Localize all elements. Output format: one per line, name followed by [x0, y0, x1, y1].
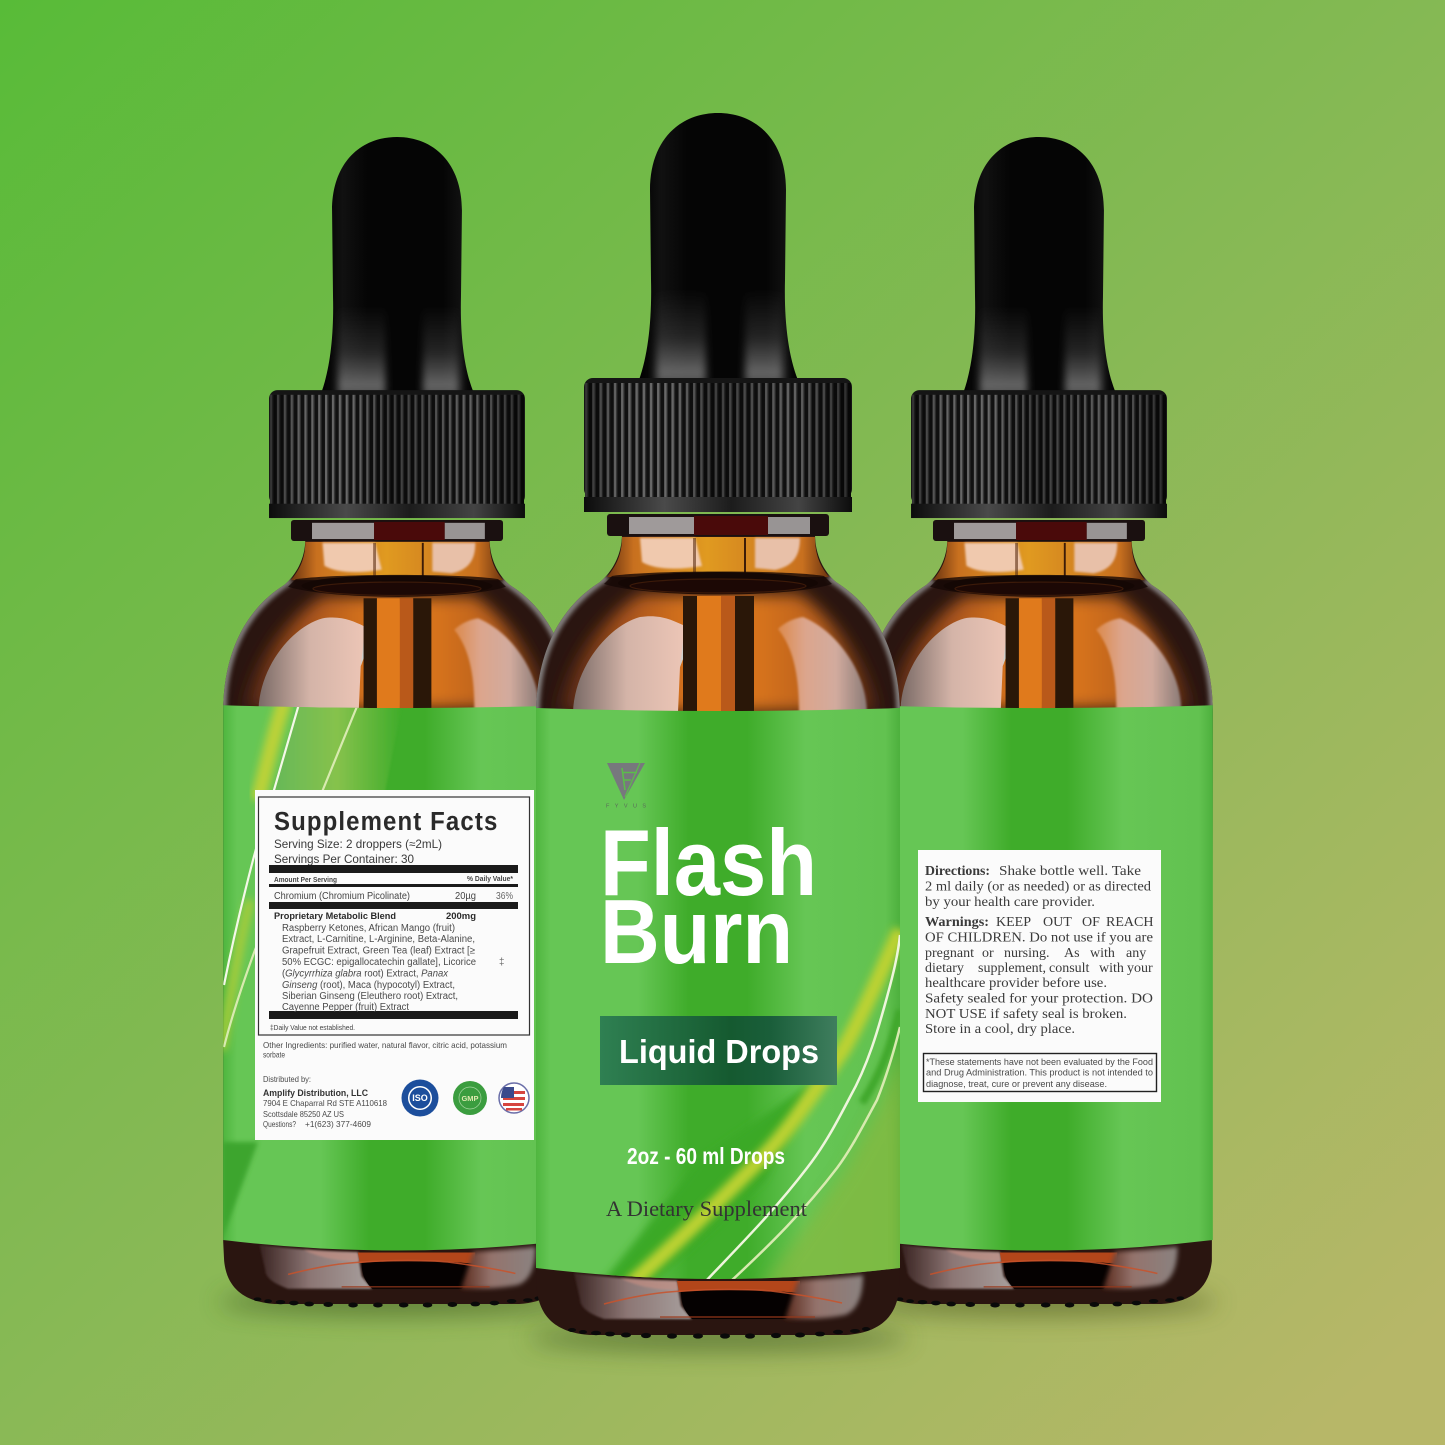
proprietary blend heading: Proprietary Metabolic Blend	[274, 911, 396, 922]
directions text: Shake bottle well. Take	[999, 864, 1141, 879]
distributor details	[263, 1074, 387, 1129]
warnings text: supplement,	[978, 961, 1046, 976]
heading: supplement facts: Supplement Facts	[274, 808, 498, 836]
table header: % Daily Value*	[467, 876, 513, 883]
proprietary blend heading: 200mg	[446, 911, 476, 922]
center label swooshes	[600, 930, 905, 1290]
left green label	[223, 705, 571, 1251]
center bottle: front label	[536, 113, 905, 1339]
serving information	[274, 837, 442, 866]
liquid drops banner	[600, 1016, 837, 1085]
left ribbed cap	[269, 390, 525, 518]
distributor details: +1(623) 377-4609	[305, 1119, 371, 1129]
table header	[274, 876, 513, 884]
directions white panel	[918, 850, 1161, 1102]
left amber glass body	[223, 520, 571, 1307]
proprietary blend ingredients: Ginseng (root), Maca (hypocotyl) Extract,	[282, 980, 455, 991]
chromium row: 36%	[496, 891, 513, 902]
proprietary blend ingredients: (Glycyrrhiza glabra root) Extract, Panax	[282, 968, 449, 980]
warnings text: Safety sealed for your protection. DO	[925, 992, 1153, 1006]
chromium row: 20µg	[455, 891, 476, 902]
other ingredients	[263, 1040, 507, 1060]
right amber glass body	[865, 520, 1213, 1307]
FDA disclaimer box: *These statements have not been evaluated by the Food	[926, 1057, 1153, 1067]
proprietary blend heading	[274, 911, 476, 922]
left bottle: supplement facts	[222, 137, 571, 1307]
supplement facts box	[258, 797, 530, 1035]
product name: Burn	[600, 882, 793, 983]
volume text: 2oz - 60 ml Drops	[627, 1143, 785, 1169]
supplement facts white panel	[255, 790, 534, 1140]
icon: ISO badge: ISO	[412, 1093, 428, 1103]
warnings text: nursing.	[1004, 946, 1050, 961]
serving information: Servings Per Container: 30	[274, 852, 414, 866]
distributor details: Questions?	[263, 1119, 296, 1129]
icon: GMP badge	[453, 1081, 487, 1115]
warnings text: NOT USE if safety seal is broken.	[925, 1007, 1127, 1022]
chromium row	[274, 891, 513, 902]
serving information: Serving Size: 2 droppers (≈2mL)	[274, 837, 442, 851]
right bottle: directions	[865, 137, 1213, 1307]
liquid drops banner: Liquid Drops	[619, 1033, 819, 1070]
proprietary blend ingredients: Siberian Ginseng (Eleuthero root) Extract,	[282, 991, 458, 1002]
warnings text: with	[1099, 961, 1124, 976]
icon: Fyvus logo	[606, 763, 646, 810]
warnings text: consult	[1049, 961, 1090, 976]
icon: GMP badge: GMP	[461, 1094, 479, 1103]
distributor details: Amplify Distribution, LLC	[263, 1088, 368, 1099]
warnings text: pregnant	[925, 946, 974, 961]
right green label	[865, 705, 1213, 1251]
other ingredients: sorbate	[263, 1050, 285, 1060]
icon: ISO badge	[402, 1080, 438, 1116]
daily value footnote: ‡Daily Value not established.	[270, 1023, 355, 1032]
warnings text: Warnings:	[925, 915, 989, 930]
proprietary blend ingredients: Cayenne Pepper (fruit) Extract	[282, 1002, 409, 1013]
proprietary blend ingredients	[282, 923, 504, 1013]
warnings text: As	[1064, 946, 1080, 961]
FDA disclaimer box	[924, 1054, 1156, 1092]
warnings text: KEEP	[996, 915, 1031, 930]
warnings text: REACH	[1106, 915, 1153, 930]
table header: Amount Per Serving	[274, 877, 337, 884]
other ingredients: Other Ingredients: purified water, natural flavor, citric acid, potassium	[263, 1040, 507, 1050]
chromium row: Chromium (Chromium Picolinate)	[274, 891, 410, 902]
shadow: under bottles	[219, 1288, 1217, 1351]
FDA disclaimer box: diagnose, treat, cure or prevent any disease.	[926, 1079, 1107, 1089]
left label swooshes	[222, 700, 402, 1240]
proprietary blend ingredients: Raspberry Ketones, African Mango (fruit)	[282, 923, 455, 934]
proprietary blend ingredients: Extract, L-Carnitine, L-Arginine, Beta-Alanine,	[282, 934, 475, 945]
distributor details: 7904 E Chaparral Rd STE A110618	[263, 1098, 387, 1108]
proprietary blend ingredients: Grapefruit Extract, Green Tea (leaf) Extract [≥	[282, 946, 476, 956]
directions text: by your health care provider.	[925, 895, 1095, 910]
warnings text: OF	[1082, 915, 1100, 930]
warnings text: OF CHILDREN. Do not use if you are	[925, 930, 1153, 946]
distributor details: Scottsdale 85250 AZ US	[263, 1109, 344, 1119]
icon: USA badge	[499, 1083, 529, 1113]
warnings text: or	[982, 946, 994, 961]
warnings text	[925, 915, 1153, 1037]
right ribbed cap	[911, 390, 1167, 518]
directions text	[925, 864, 1151, 910]
warnings text: any	[1126, 946, 1146, 961]
product name	[600, 810, 817, 983]
product name: Flash	[600, 810, 817, 915]
center green label	[536, 708, 900, 1279]
center dropper bulb	[639, 113, 798, 385]
right dropper bulb	[964, 137, 1115, 397]
heavy rules	[269, 865, 518, 1019]
warnings text: your	[1127, 961, 1153, 976]
proprietary blend ingredients: ‡	[499, 957, 504, 968]
left dropper bulb	[322, 137, 473, 397]
warnings text: dietary	[925, 961, 964, 976]
warnings text: OUT	[1043, 915, 1072, 930]
FDA disclaimer box: and Drug Administration. This product is not intended to	[926, 1068, 1153, 1078]
warnings text: Store in a cool, dry place.	[925, 1022, 1075, 1037]
center ribbed cap	[584, 378, 852, 512]
dietary supplement text: A Dietary Supplement	[606, 1196, 807, 1221]
warnings text: with	[1090, 946, 1115, 961]
proprietary blend ingredients: 50% ECGC: epigallocatechin gallate], Licorice	[282, 957, 476, 968]
center amber glass body	[536, 514, 900, 1339]
directions text: 2 ml daily (or as needed) or as directed	[925, 880, 1151, 894]
directions text: Directions:	[925, 864, 990, 879]
warnings text: healthcare provider before use.	[925, 976, 1107, 991]
distributor details: Distributed by:	[263, 1074, 311, 1084]
icon: Fyvus logo: FYVUS	[606, 804, 646, 810]
